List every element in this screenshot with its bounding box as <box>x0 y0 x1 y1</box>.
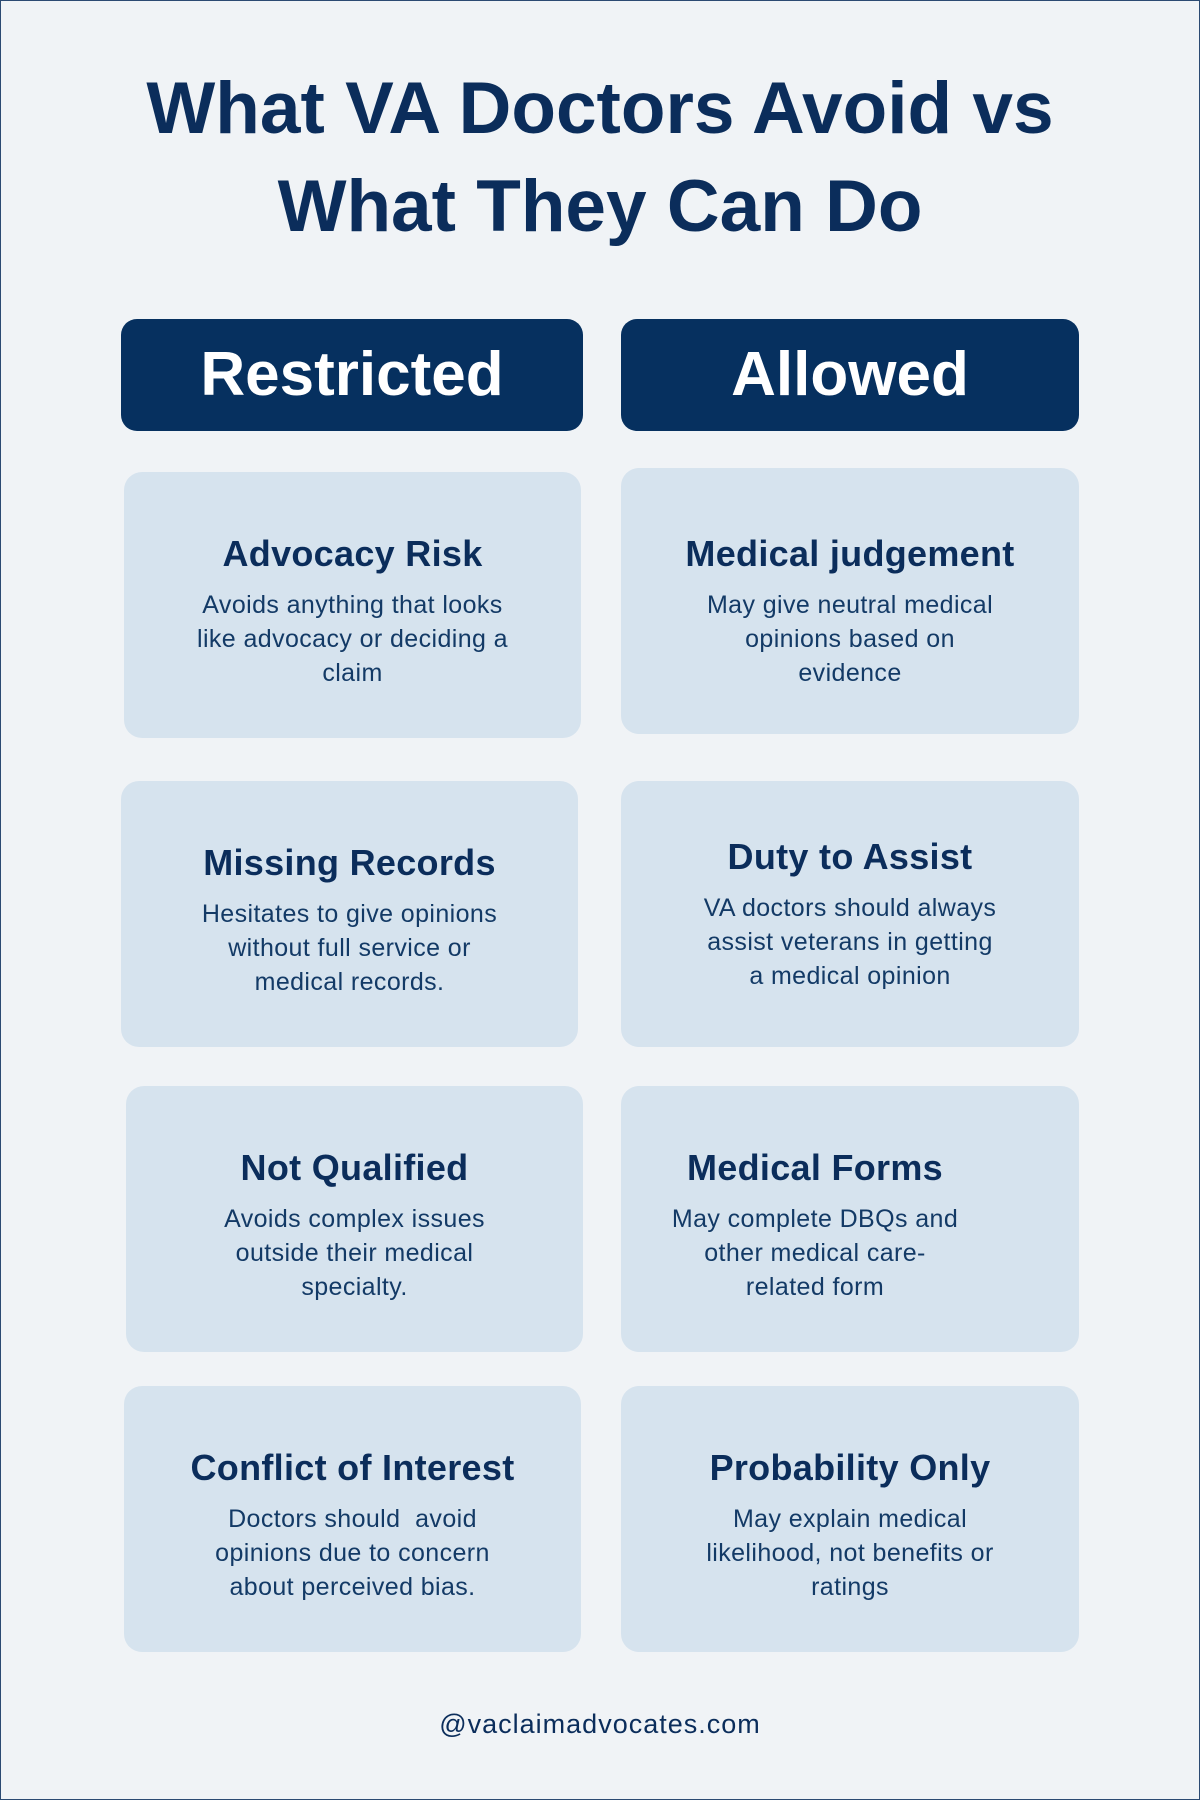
card: Conflict of Interest: Conflict of Interest <box>190 1447 514 1488</box>
header: Allowed <box>621 319 1079 431</box>
card: Advocacy Risk: Avoids anything that looks <box>202 591 503 619</box>
card: Not Qualified <box>126 1086 583 1352</box>
card: Medical Forms: Medical Forms <box>687 1147 943 1188</box>
card: Probability Only <box>621 1386 1079 1652</box>
card: Advocacy Risk <box>124 472 581 738</box>
card: Missing Records <box>121 781 578 1047</box>
card: Not Qualified: outside their medical <box>236 1239 473 1267</box>
card: Probability Only: ratings <box>811 1573 889 1601</box>
card: Missing Records: medical records. <box>255 968 444 996</box>
card: Duty to Assist: assist veterans in getting <box>707 928 993 956</box>
card: Duty to Assist: a medical opinion <box>749 962 951 990</box>
card: Not Qualified: Avoids complex issues <box>224 1205 485 1233</box>
title <box>146 68 1054 247</box>
card: Duty to Assist: VA doctors should always <box>704 894 996 922</box>
card: Medical Forms <box>621 1086 1079 1352</box>
card: Duty to Assist: Duty to Assist <box>728 836 972 877</box>
card: Probability Only: likelihood, not benefits or <box>706 1539 994 1567</box>
card: Medical Forms: related form <box>746 1273 884 1301</box>
card: Duty to Assist <box>621 781 1079 1047</box>
card: Missing Records: Hesitates to give opinions <box>202 900 497 928</box>
title: What VA Doctors Avoid vs <box>146 68 1054 149</box>
card: Medical judgement <box>621 468 1079 734</box>
card: Missing Records: Missing Records <box>203 842 496 883</box>
card: Medical judgement: Medical judgement <box>685 533 1015 574</box>
card: Advocacy Risk: like advocacy or deciding a <box>197 625 508 653</box>
header: Allowed: Allowed <box>731 340 969 409</box>
card: Medical Forms: May complete DBQs and <box>672 1205 958 1233</box>
card: Not Qualified: Not Qualified <box>241 1147 468 1188</box>
card: Probability Only: May explain medical <box>733 1505 967 1533</box>
card: Probability Only: Probability Only <box>710 1447 990 1488</box>
card: Medical Forms: other medical care- <box>704 1239 926 1267</box>
card: Conflict of Interest <box>124 1386 581 1652</box>
header: Restricted: Restricted <box>200 340 504 409</box>
card: Not Qualified: specialty. <box>301 1273 408 1301</box>
header: Restricted <box>121 319 583 431</box>
card: Medical judgement: May give neutral medical <box>707 591 993 619</box>
footer: @vaclaimadvocates.com <box>439 1709 761 1739</box>
card: Medical judgement: evidence <box>798 659 902 687</box>
card: Medical judgement: opinions based on <box>745 625 955 653</box>
card: Advocacy Risk: Advocacy Risk <box>222 533 483 574</box>
card: Missing Records: without full service or <box>228 934 471 962</box>
card: Conflict of Interest: Doctors should avoid <box>228 1505 477 1533</box>
title: What They Can Do <box>278 166 922 247</box>
card: Advocacy Risk: claim <box>322 659 383 687</box>
card: Conflict of Interest: about perceived bias. <box>229 1573 476 1601</box>
card: Conflict of Interest: opinions due to concern <box>215 1539 490 1567</box>
